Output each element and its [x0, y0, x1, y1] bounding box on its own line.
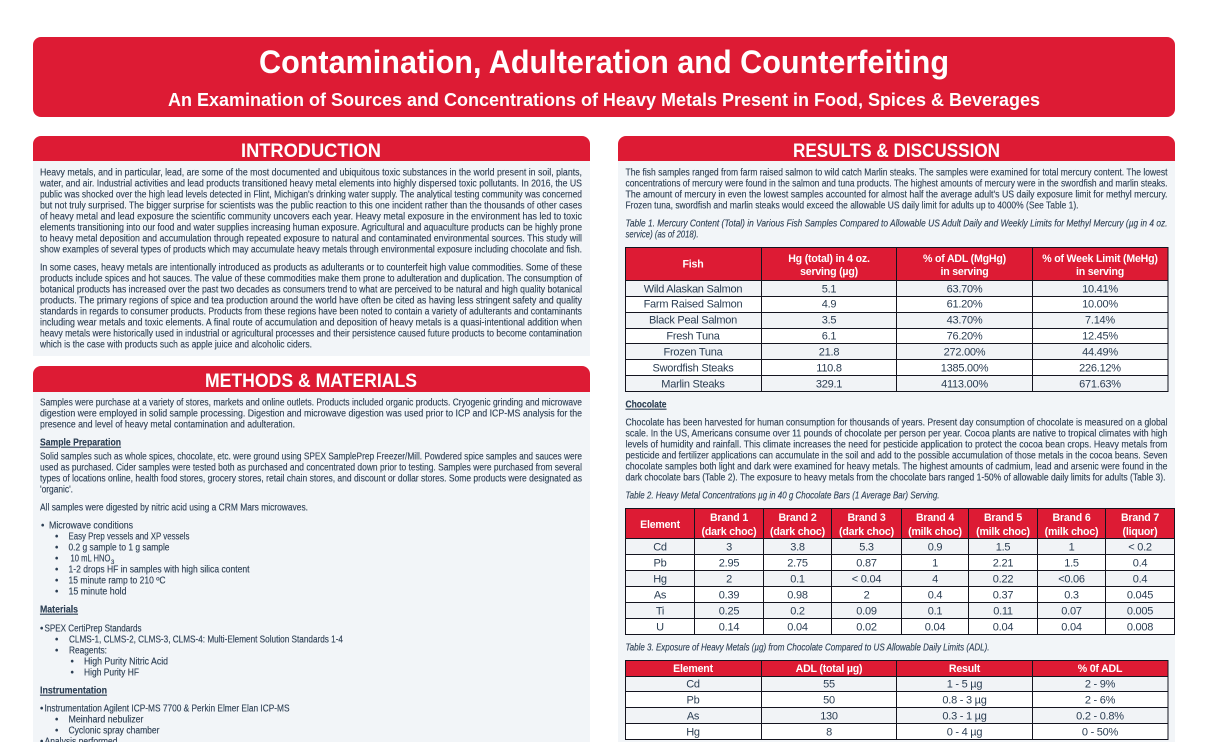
table 1: mercury content: Swordfish Steaks: [653, 363, 734, 375]
panel: results and discussion: RESULTS & DISCUSSION: [793, 141, 1000, 162]
table 2: heavy metal concentrations: 0.04: [1061, 622, 1082, 634]
table 2: heavy metal concentrations: (dark choc): [839, 526, 894, 538]
sample preparation section: [40, 438, 582, 514]
table 2: heavy metal concentrations: Brand 4: [916, 512, 954, 524]
table 1 caption: service) (as of 2018).: [626, 230, 698, 241]
materials section: Reagents:: [69, 646, 107, 657]
table 1: mercury content: 329.1: [816, 379, 842, 391]
table 2: heavy metal concentrations: 0.14: [719, 622, 739, 634]
table 1 caption: [626, 219, 1168, 241]
title banner: An Examination of Sources and Concentrations of Heavy Metals Present in Food, Spices & Beverages: [168, 90, 1040, 110]
microwave conditions list: 1-2 drops HF in samples with high silica content: [68, 565, 250, 576]
table 2: heavy metal concentrations: < 0.2: [1128, 542, 1152, 554]
table 2: heavy metal concentrations: 0.3: [1064, 590, 1079, 602]
table 3: chocolate exposure vs daily limits: 1 - 5 µg: [947, 679, 982, 691]
table 1: mercury content: 61.20%: [947, 299, 983, 311]
table 2: heavy metal concentrations: 1: [1069, 542, 1075, 554]
table 2: heavy metal concentrations: Element: [640, 519, 681, 531]
table 3: chocolate exposure vs daily limits: % 0f ADL: [1078, 663, 1123, 675]
table 3: chocolate exposure vs daily limits: 0 - 4 µg: [947, 727, 982, 739]
table 3: chocolate exposure vs daily limits: ADL (total µg): [796, 663, 862, 675]
table 2: heavy metal concentrations: (dark choc): [770, 526, 825, 538]
table 1: mercury content: 110.8: [816, 363, 842, 375]
table 2: heavy metal concentrations: As: [654, 590, 667, 602]
introduction paragraph two: standards in regards to consumer products. Products from these regions have been noted to contain a variety of adulterants and contaminants: [40, 307, 582, 318]
table 2: heavy metal concentrations: 2.75: [787, 558, 808, 570]
table 2: heavy metal concentrations: 0.4: [1133, 558, 1147, 570]
sample preparation section: Sample Preparation: [40, 438, 121, 449]
table 1: mercury content: Marlin Steaks: [661, 379, 725, 391]
instrumentation section: Meinhard nebulizer: [68, 715, 144, 726]
introduction paragraph one: show examples of several types of products which may accumulate heavy metals through environmental exposure including chocolate and fish.: [40, 245, 582, 256]
table 2: heavy metal concentrations: 3: [726, 542, 732, 554]
table 1: mercury content: Farm Raised Salmon: [644, 299, 743, 311]
table 1: mercury content: % of Week Limit (MeHg): [1042, 253, 1158, 265]
introduction paragraph two: products include spices and hot sauces. The value of these commodities make them prone to adulteration and duplication. The consumption of: [40, 274, 582, 285]
table 1: mercury content: 4.9: [822, 299, 836, 311]
table 2: heavy metal concentrations: (liquor): [1123, 526, 1157, 538]
table 2: heavy metal concentrations: 0.37: [993, 590, 1013, 602]
table 3: chocolate exposure vs daily limits: 2 - 6%: [1085, 695, 1116, 707]
introduction paragraph two: including wear metals and toxic elements. A final route of accumulation and deposition of heavy metals is a quasi-intentional addition when: [40, 318, 582, 329]
table 1: mercury content: 10.00%: [1082, 299, 1118, 311]
table 2: heavy metal concentrations: [626, 508, 1175, 635]
table 1: mercury content: [626, 247, 1168, 392]
table 2: heavy metal concentrations: U: [656, 622, 664, 634]
table 2: heavy metal concentrations: 0.045: [1127, 590, 1153, 602]
table 1: mercury content: 10.41%: [1082, 284, 1118, 296]
table 2: heavy metal concentrations: Brand 2: [778, 512, 817, 524]
table 2: heavy metal concentrations: 1: [932, 558, 938, 570]
table 2: heavy metal concentrations: 0.22: [993, 574, 1013, 586]
table 1: mercury content: Hg (total) in 4 oz.: [788, 253, 870, 265]
table 2: heavy metal concentrations: < 0.04: [852, 574, 881, 586]
materials section: CLMS-1, CLMS-2, CLMS-3, CLMS-4: Multi-Element Solution Standards 1-4: [69, 635, 344, 646]
microwave conditions list: •: [55, 554, 59, 565]
table 2: heavy metal concentrations: 0.07: [1061, 606, 1082, 618]
table 2: heavy metal concentrations: Pb: [654, 558, 667, 570]
introduction paragraph one: of heavy metal and lead exposure the scientific community uncovers each year. Heavy metal exposure in the environment has led to toxic: [40, 212, 582, 223]
table 2: heavy metal concentrations: 1.5: [996, 542, 1010, 554]
table 2: heavy metal concentrations: 3.8: [790, 542, 805, 554]
table 2: heavy metal concentrations: (milk choc): [1045, 526, 1098, 538]
sample preparation section: All samples were digested by nitric acid using a CRM Mars microwaves.: [40, 503, 308, 514]
methods intro text: Samples were purchase at a variety of stores, markets and online outlets. Products included organic products. Cryogenic grinding and microwave: [40, 398, 582, 409]
materials section: High Purity HF: [84, 668, 139, 679]
introduction paragraph one: Heavy metals, and in particular, lead, are some of the most documented and ubiquitous toxic substances in the world present in soil, plants,: [40, 168, 582, 179]
table 2: heavy metal concentrations: 0.1: [790, 574, 805, 586]
materials section: •: [55, 646, 59, 657]
table 1: mercury content: Black Peal Salmon: [649, 315, 737, 327]
table 2: heavy metal concentrations: 2: [726, 574, 732, 586]
methods intro text: presence and level of heavy metal contamination and adulteration.: [40, 420, 295, 431]
microwave conditions list: 10 mL HNO: [70, 554, 111, 565]
table 2: heavy metal concentrations: 1.5: [1064, 558, 1079, 570]
table 1: mercury content: 76.20%: [947, 331, 983, 343]
instrumentation section: •: [40, 704, 44, 715]
table 2: heavy metal concentrations: 0.39: [719, 590, 739, 602]
table 1: mercury content: in serving: [940, 266, 989, 278]
table 3: chocolate exposure vs daily limits: Element: [673, 663, 714, 675]
sample preparation section: types of locations online, health food stores, grocery stores, retail chain stores, and discount or dollar stores. Some products were designated as: [40, 474, 582, 485]
table 2: heavy metal concentrations: (dark choc): [702, 526, 756, 538]
microwave conditions list: •: [55, 587, 59, 598]
microwave conditions list: 15 minute hold: [68, 587, 126, 598]
table 3: chocolate exposure vs daily limits: Result: [949, 663, 981, 675]
fish results text: The amount of mercury in even the lowest samples accounted for almost half the average adult's US daily exposure limit for methyl mercury.: [626, 190, 1168, 201]
materials section: •: [40, 624, 44, 635]
table 2: heavy metal concentrations: Brand 1: [710, 512, 748, 524]
table 3: chocolate exposure vs daily limits: 130: [820, 711, 838, 723]
chocolate section text: [626, 400, 1168, 484]
table 1: mercury content: 3.5: [822, 315, 836, 327]
introduction paragraph two: which is the case with products such as apple juice and alcoholic ciders.: [39, 340, 312, 351]
table 3: chocolate exposure vs daily limits: 50: [823, 695, 835, 707]
table 2: heavy metal concentrations: 2.95: [719, 558, 739, 570]
table 1: mercury content: in serving: [1076, 266, 1124, 278]
table 2: heavy metal concentrations: 0.11: [993, 606, 1013, 618]
table 2: heavy metal concentrations: 0.25: [719, 606, 739, 618]
table 3: chocolate exposure vs daily limits: [626, 660, 1168, 740]
table 3: chocolate exposure vs daily limits: As: [687, 711, 700, 723]
panel: results and discussion: [618, 136, 1175, 742]
introduction paragraph one: elements transitioning into our food and water supplies increasing human exposure. Agricultural and aquaculture products can be highly prone: [40, 223, 582, 234]
table 1: mercury content: Fish: [683, 259, 703, 271]
chocolate section text: Chocolate: [626, 400, 667, 411]
instrumentation section: [40, 686, 290, 742]
table 1: mercury content: 7.14%: [1085, 315, 1115, 327]
table 2: heavy metal concentrations: 0.04: [787, 622, 808, 634]
table 3: chocolate exposure vs daily limits: 8: [826, 727, 832, 739]
table 2 caption: Table 2. Heavy Metal Concentrations µg in 40 g Chocolate Bars (1 Average Bar) Serving.: [626, 491, 940, 502]
table 2: heavy metal concentrations: Ti: [656, 606, 664, 618]
materials section: SPEX CertiPrep Standards: [44, 624, 142, 635]
table 2: heavy metal concentrations: (milk choc): [976, 526, 1030, 538]
table 1: mercury content: Frozen Tuna: [663, 347, 724, 359]
materials section: •: [70, 668, 74, 679]
table 2: heavy metal concentrations: 0.04: [993, 622, 1013, 634]
introduction paragraph one: to heavy metal deposition and accumulation through repeated exposure to natural and contaminated environmental sources. This study will: [40, 234, 582, 245]
table 1: mercury content: 226.12%: [1079, 363, 1121, 375]
table 1: mercury content: 5.1: [822, 284, 836, 296]
table 2: heavy metal concentrations: 2: [864, 590, 870, 602]
introduction paragraph one: water, and air. Industrial activities and lead products transitioned heavy metal elements into highly dispersed toxic pollutants. In 2016, the US: [39, 179, 582, 190]
table 2: heavy metal concentrations: 0.4: [928, 590, 942, 602]
title banner: Contamination, Adulteration and Counterfeiting: [259, 44, 949, 80]
table 3: chocolate exposure vs daily limits: 0.2 - 0.8%: [1076, 711, 1124, 723]
introduction paragraph two: In some cases, heavy metals are intentionally introduced as products as adulterants or to counterfeit high value commodities. Some of these: [40, 263, 582, 274]
instrumentation section: Cyclonic spray chamber: [68, 726, 160, 737]
microwave conditions list: 15 minute ramp to 210 ºC: [68, 576, 166, 587]
materials section: [40, 605, 344, 679]
introduction paragraph two: [39, 263, 582, 351]
methods intro text: [40, 398, 582, 431]
table 3 caption: Table 3. Exposure of Heavy Metals (µg) from Chocolate Compared to US Allowable Daily Limits (ADL).: [626, 643, 990, 654]
materials section: High Purity Nitric Acid: [84, 657, 168, 668]
instrumentation section: Instrumentation Agilent ICP-MS 7700 & Perkin Elmer Elan ICP-MS: [44, 704, 290, 715]
table 3: chocolate exposure vs daily limits: 55: [823, 679, 835, 691]
microwave conditions list: 0.2 g sample to 1 g sample: [68, 543, 170, 554]
table 1: mercury content: 63.70%: [947, 284, 983, 296]
introduction paragraph one: public was shocked over the high lead levels detected in Flint, Michigan's drinking water supply. The analytical testing community was concerned: [40, 190, 582, 201]
table 1: mercury content: 21.8: [819, 347, 839, 359]
table 2: heavy metal concentrations: 0.008: [1127, 622, 1153, 634]
microwave conditions list: •: [55, 543, 59, 554]
table 2: heavy metal concentrations: (milk choc): [908, 526, 962, 538]
microwave conditions list: •: [55, 576, 59, 587]
table 2: heavy metal concentrations: Brand 5: [984, 512, 1022, 524]
introduction paragraph two: botanical products has increased over the past two decades as consumers trend to what are perceived to be natural and high quality botanical: [40, 285, 582, 296]
sample preparation section: 'organic'.: [40, 485, 73, 496]
introduction paragraph one: [39, 168, 582, 256]
introduction paragraph one: but not truly surprised. The bigger surprise for scientists was the public reaction to this one incident rather than the thousands of other cases: [40, 201, 582, 212]
table 3: chocolate exposure vs daily limits: 0.8 - 3 µg: [942, 695, 987, 707]
instrumentation section: •: [55, 715, 59, 726]
table 1: mercury content: % of ADL (MgHg): [923, 253, 1006, 265]
table 3: chocolate exposure vs daily limits: 0.3 - 1 µg: [942, 711, 987, 723]
panel: introduction: [33, 136, 590, 356]
table 2: heavy metal concentrations: 0.1: [928, 606, 942, 618]
microwave conditions list: [41, 521, 250, 598]
materials section: •: [70, 657, 74, 668]
microwave conditions list: Microwave conditions: [49, 521, 133, 532]
panel: introduction: INTRODUCTION: [241, 141, 381, 162]
table 1: mercury content: 4113.00%: [941, 379, 988, 391]
microwave conditions list: Easy Prep vessels and XP vessels: [68, 532, 190, 543]
microwave conditions list: 3: [111, 560, 115, 566]
table 2: heavy metal concentrations: Brand 6: [1052, 512, 1091, 524]
table 3: chocolate exposure vs daily limits: Cd: [686, 679, 700, 691]
panel: methods and materials: METHODS & MATERIALS: [205, 371, 417, 392]
instrumentation section: •: [55, 726, 59, 737]
microwave conditions list: •: [55, 532, 59, 543]
table 1: mercury content: 671.63%: [1079, 379, 1121, 391]
table 2: heavy metal concentrations: 0.87: [856, 558, 877, 570]
instrumentation section: Instrumentation: [40, 686, 107, 697]
sample preparation section: used as purchased. Cider samples were tested both as purchased and concentrated down prior to testing. Samples were purchased from several: [40, 463, 582, 474]
table 1: mercury content: 6.1: [822, 331, 836, 343]
table 1: mercury content: 1385.00%: [941, 363, 989, 375]
table 2: heavy metal concentrations: Brand 3: [847, 512, 886, 524]
table 2: heavy metal concentrations: 0.4: [1133, 574, 1147, 586]
introduction paragraph two: products. The primary regions of spice and tea production around the world have often be cited as having less stringent safety and quality: [40, 296, 582, 307]
table 2: heavy metal concentrations: 0.04: [925, 622, 945, 634]
table 1: mercury content: Wild Alaskan Salmon: [644, 284, 742, 296]
table 3: chocolate exposure vs daily limits: 0 - 50%: [1082, 727, 1119, 739]
table 2: heavy metal concentrations: 0.2: [790, 606, 805, 618]
table 2: heavy metal concentrations: 5.3: [859, 542, 874, 554]
table 1: mercury content: serving (µg): [800, 266, 858, 278]
title banner: [33, 37, 1175, 117]
panel: methods and materials: [33, 366, 590, 742]
table 1: mercury content: 44.49%: [1082, 347, 1118, 359]
microwave conditions list: •: [55, 565, 59, 576]
table 2: heavy metal concentrations: 0.005: [1127, 606, 1153, 618]
introduction paragraph two: heavy metals were historically used in industrial or agricultural processes and their persistence caused future products to become contamination: [40, 329, 582, 340]
table 2: heavy metal concentrations: 0.02: [856, 622, 877, 634]
fish results text: [626, 168, 1168, 212]
table 1: mercury content: 12.45%: [1082, 331, 1118, 343]
table 1: mercury content: Fresh Tuna: [666, 331, 721, 343]
materials section: •: [55, 635, 59, 646]
table 2: heavy metal concentrations: 4: [932, 574, 938, 586]
table 2: heavy metal concentrations: 2.21: [993, 558, 1013, 570]
methods intro text: digestion were employed in solid sample processing. Digestion and microwave digestion was used prior to ICP and ICP-MS analysis for the: [40, 409, 582, 420]
table 2: heavy metal concentrations: Hg: [653, 574, 667, 586]
chocolate section text: levels of humidity and rainfall. This climate increases the need for pesticide application to protect the cocoa bean crops. Heavy metals from: [626, 440, 1168, 451]
materials section: Materials: [40, 605, 78, 616]
table 2: heavy metal concentrations: <0.06: [1058, 574, 1085, 586]
sample preparation section: Solid samples such as whole spices, chocolate, etc. were ground using SPEX SamplePrep Freezer/Mill. Powdered spice samples and sauces were: [40, 452, 582, 463]
table 2: heavy metal concentrations: Brand 7: [1121, 512, 1159, 524]
table 2: heavy metal concentrations: 0.98: [787, 590, 808, 602]
table 3: chocolate exposure vs daily limits: 2 - 9%: [1085, 679, 1116, 691]
table 2: heavy metal concentrations: Cd: [653, 542, 667, 554]
microwave conditions list: •: [41, 521, 45, 532]
table 1: mercury content: 43.70%: [947, 315, 983, 327]
fish results text: Frozen tuna, swordfish and marlin steaks would exceed the allowable US daily limit for adults up to 4000% (See Table 1).: [626, 201, 1078, 212]
table 3: chocolate exposure vs daily limits: Pb: [687, 695, 700, 707]
table 1: mercury content: 272.00%: [944, 347, 986, 359]
table 2: heavy metal concentrations: 0.09: [856, 606, 877, 618]
table 2: heavy metal concentrations: 0.9: [928, 542, 942, 554]
table 3: chocolate exposure vs daily limits: Hg: [686, 727, 700, 739]
